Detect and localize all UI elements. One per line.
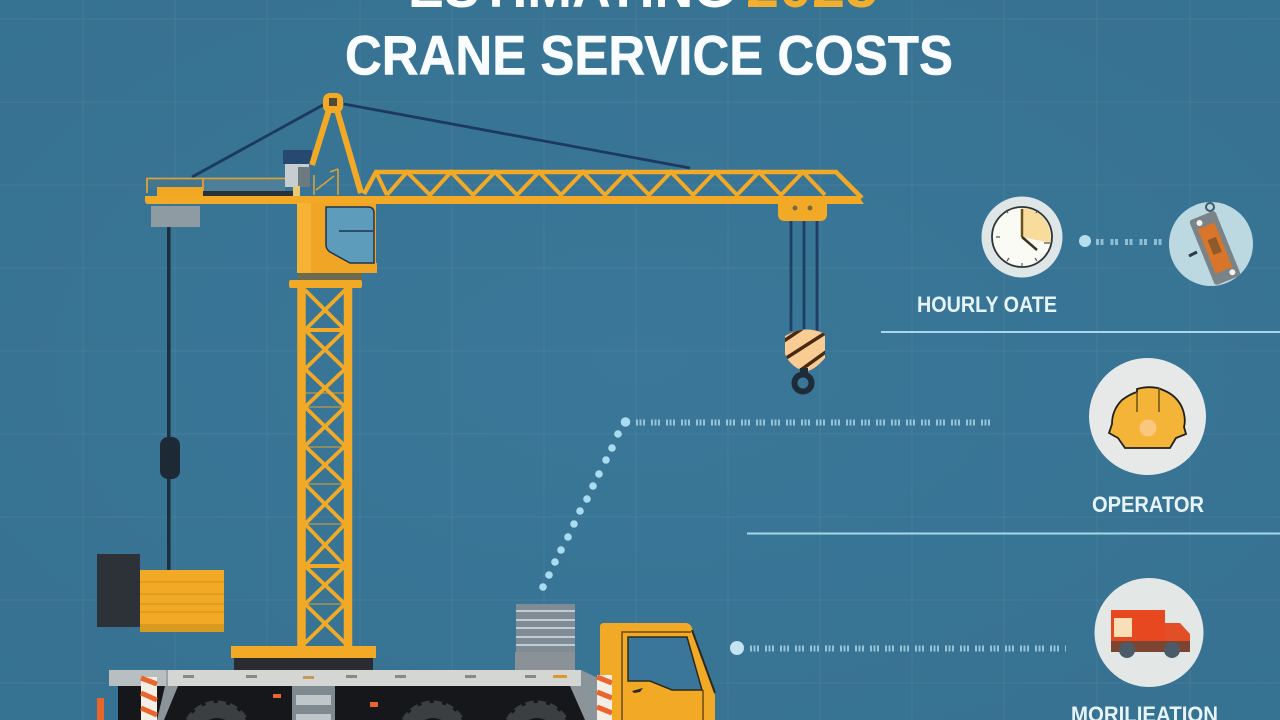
lattice mast (301, 288, 349, 646)
counter-jib railing (147, 178, 288, 193)
exhaust vent (515, 604, 575, 670)
connector (730, 641, 1066, 655)
title (345, 0, 953, 86)
slewing collar (289, 273, 362, 288)
divider (747, 532, 1280, 534)
dotted connector: centre (539, 417, 996, 591)
icon: delivery truck (1094, 578, 1204, 687)
section: operator (1089, 358, 1206, 517)
icon: hard hat (1089, 358, 1206, 475)
wheels (184, 703, 570, 720)
A-frame tower top (312, 93, 361, 193)
access ladder (292, 686, 335, 720)
marker lights (273, 694, 281, 698)
counterweight and cable (97, 227, 224, 632)
counter-jib details (157, 150, 338, 197)
title: CRANE SERVICE COSTS (345, 24, 953, 86)
section: mobilization (730, 578, 1218, 720)
truck cab (600, 623, 715, 720)
deck studs (183, 675, 567, 679)
chassis (118, 686, 585, 720)
hazard stripes (141, 675, 612, 720)
icon: clock (982, 196, 1062, 278)
icon: crane top view (1169, 202, 1253, 286)
label: HOURLY OATE (917, 292, 1057, 317)
tower crane (145, 93, 864, 670)
section: hourly rate (917, 196, 1253, 317)
mast base (231, 646, 376, 670)
frame gussets (157, 686, 600, 720)
label: OPERATOR (1092, 492, 1204, 517)
support cables (192, 104, 690, 177)
jib truss (364, 172, 862, 198)
truck (97, 604, 715, 720)
connector (1079, 235, 1166, 247)
counterweight hanger (151, 206, 200, 227)
divider (881, 331, 1280, 333)
hook block (778, 204, 827, 394)
jib bottom chord (145, 196, 864, 204)
operator cab (297, 203, 377, 273)
deck panel (109, 670, 581, 686)
